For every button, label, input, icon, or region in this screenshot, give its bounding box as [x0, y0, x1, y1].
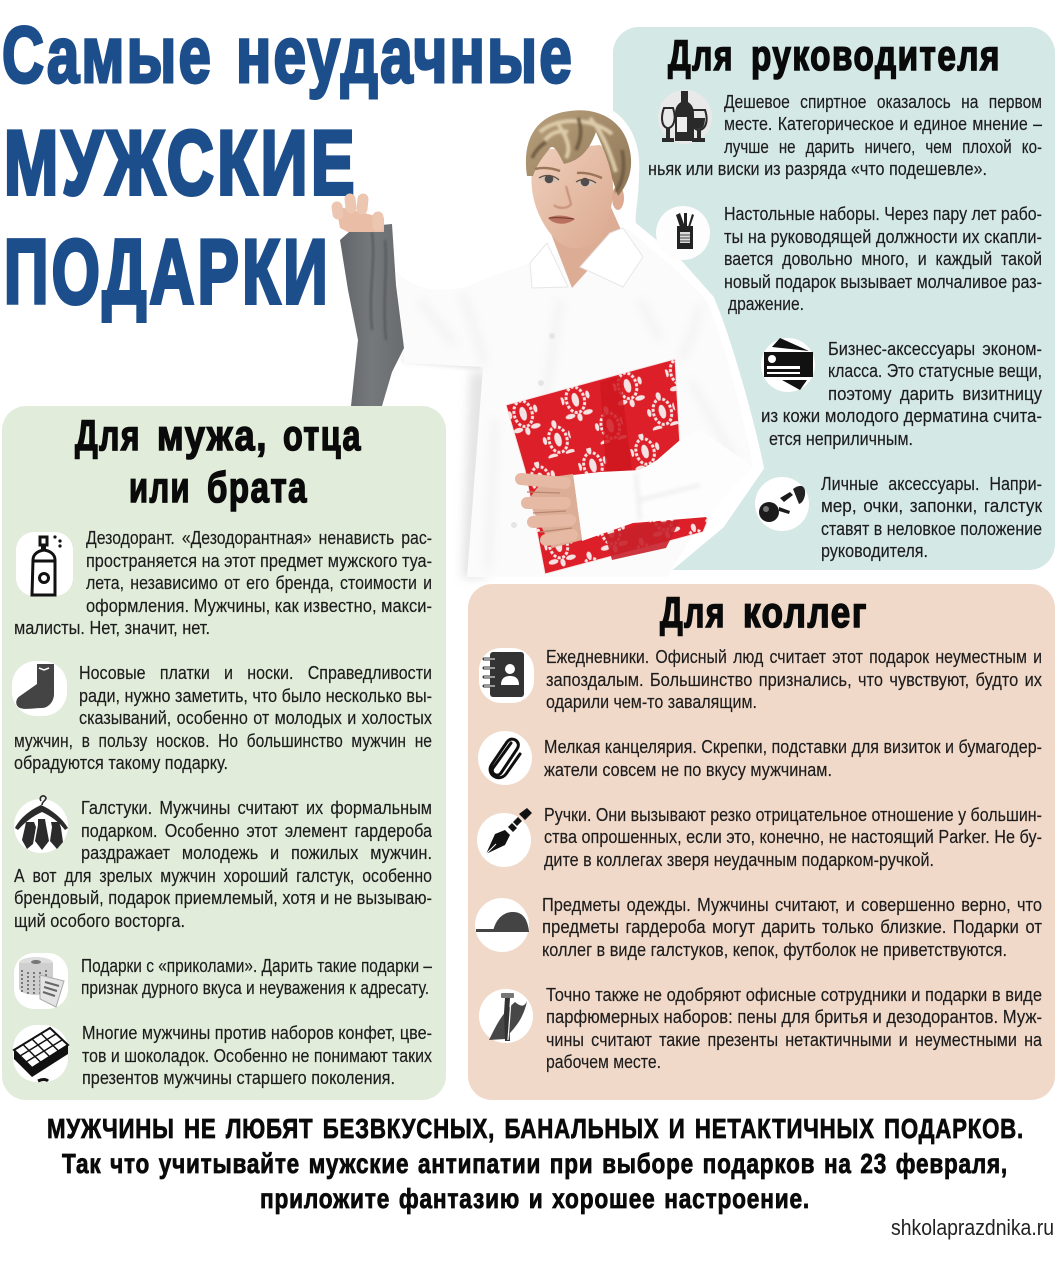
footer conclusion — [47, 1113, 1024, 1214]
gift box — [506, 359, 708, 574]
heading: for the manager — [668, 32, 1001, 80]
heading: for husband, father or brother — [75, 412, 362, 512]
collar — [530, 228, 643, 288]
heading: for husband, father or brother: отца — [283, 412, 362, 460]
icon: razor and brush — [479, 989, 533, 1043]
icon: paper clip — [478, 731, 532, 785]
text block: colleagues: коллег в виде галстуков, кепок, футболок не приветствуются. — [542, 940, 1007, 960]
text block: manager: дражение. — [728, 294, 804, 314]
text block: husband, father or brother: презентов мужчины старшего поколения. — [82, 1068, 395, 1088]
text block: manager: ется неприличным. — [769, 429, 913, 449]
sock — [340, 224, 404, 406]
text block: husband, father or brother: Подарки с «приколами». Дарить такие подарки – — [81, 956, 432, 976]
heading: for husband, father or brother: мужа, — [157, 412, 268, 460]
text block: colleagues: жатели совсем не по вкусу мужчинам. — [544, 760, 832, 780]
icon: business cards — [761, 338, 815, 392]
text block: husband, father or brother: обрадуются такому подарку. — [14, 753, 228, 773]
eyes and brows — [535, 168, 602, 186]
nose and mouth — [548, 186, 575, 224]
neck — [548, 205, 622, 288]
icon: chocolate bar — [13, 1025, 68, 1082]
icon: joke toilet paper — [14, 953, 68, 1009]
text block: colleagues: рабочем месте. — [546, 1052, 661, 1072]
title: Самые — [2, 10, 213, 99]
text block: husband, father or brother: Многие мужчины против наборов конфет, цве- — [82, 1023, 432, 1043]
panel: for husband, father or brother — [2, 406, 446, 1100]
icon: baseball cap — [475, 898, 529, 952]
hair strands — [532, 118, 624, 192]
face — [531, 145, 613, 248]
icon: desk pen holder — [656, 206, 710, 260]
sleeve — [573, 430, 752, 541]
text block: husband, father or brother: малисты. Нет, значит, нет. — [14, 618, 210, 638]
heading: for husband, father or brother: или — [129, 464, 191, 512]
icon: ties on a hanger — [14, 796, 68, 853]
icon: glasses and cufflinks — [755, 477, 809, 531]
text block: husband, father or brother: Носовые платки и носки. Справедливости — [79, 663, 432, 683]
ear — [612, 186, 624, 210]
hair — [526, 110, 631, 196]
heading: for colleagues: Для — [660, 589, 726, 637]
heading: for colleagues: коллег — [743, 589, 868, 637]
text block: husband, father or brother: лета, независимо от его бренда, стоимости и — [86, 573, 432, 593]
text block: husband, father or brother: А вот для зрелых мужчин хороший галстук, особенно — [14, 866, 432, 886]
text block: husband, father or brother: Галстуки. Мужчины считают их формальным — [81, 798, 432, 818]
shirt buttons — [511, 333, 555, 528]
text block: manager: поэтому дарить визитницу — [828, 384, 1042, 404]
footer conclusion: приложите фантазию и хорошее настроение. — [260, 1183, 810, 1214]
panel: for colleagues — [468, 584, 1055, 1100]
white halo — [395, 104, 762, 580]
text block: husband, father or brother: щий особого восторга. — [14, 911, 185, 931]
title: МУЖСКИЕ — [4, 113, 358, 214]
text block: manager: мер, очки, запонки, галстук — [821, 496, 1042, 516]
text block: manager — [648, 92, 1042, 561]
text block: manager: из кожи молодого дерматина счита- — [761, 406, 1042, 426]
text block: husband, father or brother: раздражает молодежь и пожилых мужчин. — [81, 843, 432, 863]
shirt folds — [420, 292, 735, 570]
text block: husband, father or brother: оформления. Мужчины, как известно, макси- — [86, 596, 432, 616]
title: ПОДАРКИ — [4, 222, 331, 323]
text block: colleagues: дите в коллегах зверя неудачным подарком-ручкой. — [544, 850, 934, 870]
text block: husband, father or brother: брендовый, подарок приемлемый, хотя и не вызываю- — [14, 888, 432, 908]
icon: wine bottle and glasses — [658, 90, 712, 144]
text block: husband, father or brother: подарком. Особенно этот элемент гардероба — [81, 821, 433, 841]
text block: husband, father or brother — [14, 528, 433, 1088]
heading: for husband, father or brother: Для — [75, 412, 141, 460]
text block: husband, father or brother: сказываний, особенно от молодых и холостых — [79, 708, 432, 728]
text block: husband, father or brother: ради, нужно заметить, что было несколько вы- — [79, 686, 432, 706]
icon: deodorant — [16, 532, 73, 596]
heading: for the manager: Для — [668, 32, 734, 80]
icon: address book — [479, 648, 534, 703]
text block: colleagues: одарили чем-то завалящим. — [546, 692, 757, 712]
text block: husband, father or brother: Дезодорант. «Дезодорантная» ненависть рас- — [86, 528, 432, 548]
shirt — [397, 228, 753, 577]
heading: for husband, father or brother: брата — [207, 464, 308, 512]
photo: man holding a sock and a gift — [336, 104, 762, 580]
hand holding sock — [336, 199, 384, 232]
text block: husband, father or brother: пространяется на этот предмет мужского туа- — [86, 551, 432, 571]
text block: husband, father or brother: мужчин, в пользу носков. Но большинство мужчин не — [14, 731, 432, 751]
text block: husband, father or brother: признак дурного вкуса и неуважения к адресату. — [81, 978, 429, 998]
text block: husband, father or brother: тов и шоколадок. Особенно не понимают таких — [82, 1046, 432, 1066]
icon: sock — [12, 661, 67, 716]
title — [2, 10, 574, 323]
soft shadow left of body — [462, 372, 492, 578]
text block: manager: ньяк или виски из разряда «что подешевле». — [648, 159, 987, 179]
text block: manager: руководителя. — [821, 541, 928, 561]
text block: colleagues — [542, 647, 1043, 1072]
heading: for colleagues — [660, 589, 868, 637]
title: неудачные — [236, 10, 574, 99]
gift ribbon — [600, 376, 680, 560]
hand on gift — [521, 474, 582, 548]
panel: for the manager — [613, 27, 1055, 570]
icon: fountain pen — [477, 808, 532, 867]
